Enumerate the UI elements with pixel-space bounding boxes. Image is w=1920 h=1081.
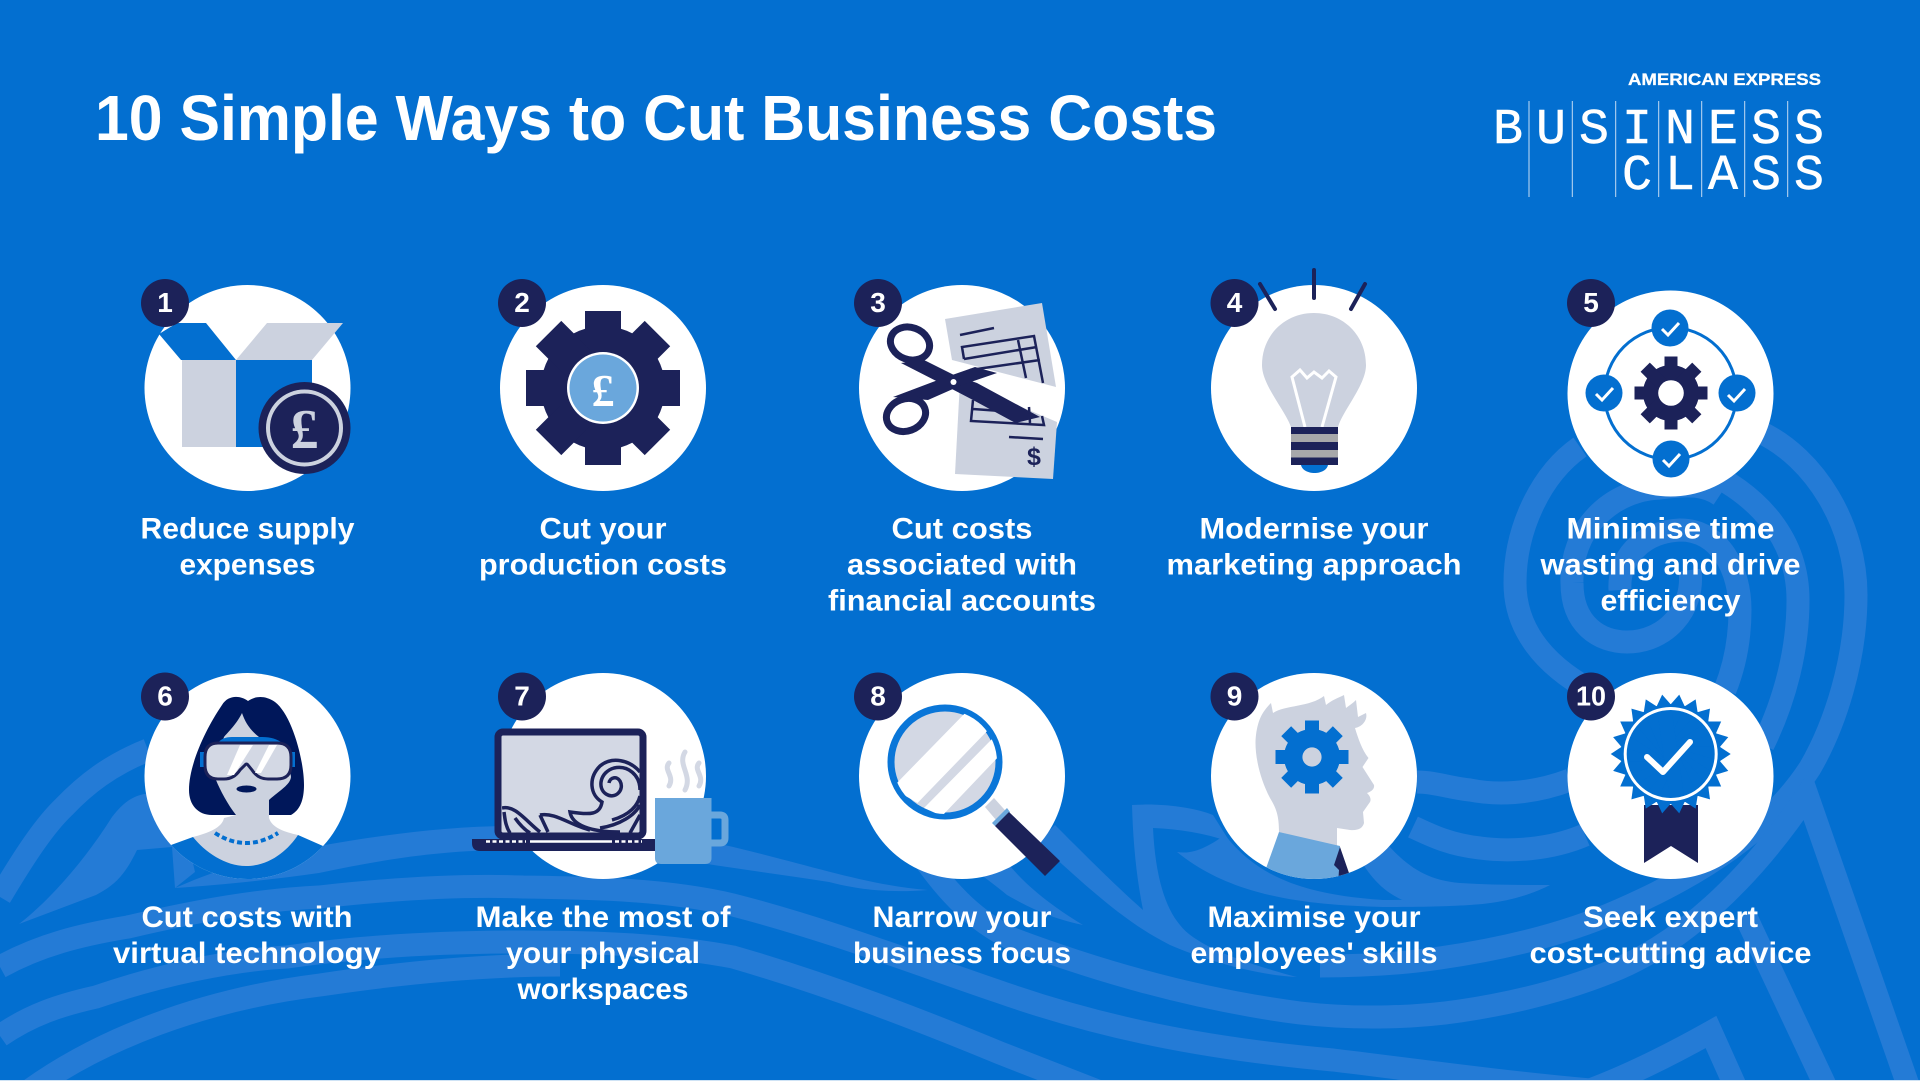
label 9: Maximise your [1208,901,1421,934]
logo: Class wordmark: C [1622,148,1652,205]
number badge 6: 6 [157,680,173,712]
item 4: marketing approach [1166,270,1462,582]
icon: scissors cutting an invoice: $ [1027,443,1041,471]
item 6: virtual technology [113,672,381,970]
logo: Business wordmark: I [1622,102,1652,159]
number badge 9: 9 [1227,680,1242,712]
item 9: employees' skills [1190,672,1438,970]
logo: Business wordmark: S [1751,102,1781,159]
mug [655,798,725,864]
icon: scissors cutting an invoice [859,285,1065,491]
label 2: Cut your [540,512,667,546]
logo: American Express Business Class [1493,70,1824,205]
number badge 9 [1210,672,1258,720]
logo: Class wordmark: S [1751,148,1781,205]
logo: Business wordmark: E [1708,102,1738,159]
icon: gear with pound: £ [592,365,614,416]
logo: Class wordmark: L [1665,148,1695,205]
item 7: physical workspaces [472,672,732,1006]
label 5: wasting and drive [1539,548,1800,582]
label 2: production costs [479,548,727,582]
label 5 [1539,512,1800,618]
number badge 5: 5 [1583,287,1599,318]
label 6 [113,901,381,970]
number badge 8: 8 [870,680,886,712]
logo: Business wordmark: U [1536,102,1566,159]
label 8: Narrow your [872,901,1052,934]
background wave pattern [0,432,1908,1081]
label 10: cost-cutting advice [1530,937,1812,970]
item 10: expert advice [1530,672,1812,970]
logo: Class wordmark: S [1794,148,1824,205]
label 1 [140,512,355,582]
label 3: Cut costs [892,512,1032,546]
label 7: Make the most of [476,901,732,934]
label 2 [479,512,727,582]
logo: Business wordmark: S [1794,102,1824,159]
number badge 3: 3 [870,287,886,318]
title: 10 Simple Ways to Cut Business Costs [95,82,1217,154]
label 4: Modernise your [1200,512,1429,546]
number badge 8 [854,672,902,720]
icon: box and pound coin: £ [290,399,318,461]
label 3 [828,512,1096,618]
number badge 2 [498,279,546,327]
number badge 7: 7 [514,680,530,712]
number badge 3 [854,279,902,327]
logo: Business wordmark: B [1493,102,1523,159]
item 3: financial accounts [828,279,1096,618]
label 4 [1166,512,1462,582]
logo: Class wordmark: A [1708,148,1738,205]
label 10 [1530,901,1812,970]
item 2: production costs [479,279,727,582]
number badge 5 [1567,279,1615,327]
icon: head profile with gear [1211,673,1417,890]
steam [667,752,701,790]
label 1: expenses [180,548,316,582]
icon: box and pound coin [144,285,350,491]
label 9 [1190,901,1438,970]
number badge 7 [498,672,546,720]
laptop [472,732,660,851]
item 8: narrow business focus [853,672,1071,970]
number badge 4: 4 [1227,287,1243,318]
logo: Business wordmark [1493,102,1824,159]
number badge 10: 10 [1576,680,1606,712]
number badge 1: 1 [157,287,173,318]
label 8: business focus [853,937,1071,970]
logo: brand name: AMERICAN EXPRESS [1628,70,1821,89]
label 1: Reduce supply [140,512,355,546]
item 1: reduce supply expenses [140,279,355,582]
label 3: financial accounts [828,584,1096,618]
item 5: minimise time wasting [1539,279,1800,618]
label 7 [476,901,732,1006]
label 7: your physical [506,937,700,970]
icon: award rosette [1568,673,1774,879]
number badge 10 [1567,672,1615,720]
icon: magnifying glass [859,673,1065,879]
label 7: workspaces [517,973,688,1006]
number badge 1 [141,279,189,327]
number badge 2: 2 [514,287,530,318]
logo: Business wordmark: N [1665,102,1695,159]
label 5: efficiency [1600,584,1741,618]
label 8 [853,901,1071,970]
logo: Class wordmark [1622,148,1824,205]
label 6: Cut costs with [142,901,352,934]
scissors [882,322,1040,437]
icon: woman with VR goggles [144,673,350,890]
label 3: associated with [847,548,1077,582]
number badge 4 [1210,279,1258,327]
number badge 6 [141,672,189,720]
label 6: virtual technology [113,937,381,970]
label 10: Seek expert [1583,901,1758,934]
label 4: marketing approach [1166,548,1462,582]
icon: gear with checkmark cycle [1568,290,1774,496]
icon: light bulb [1211,270,1417,491]
label 5: Minimise time [1566,512,1774,546]
label 9: employees' skills [1190,937,1438,970]
logo: Business wordmark: S [1579,102,1609,159]
icon: gear with pound [500,285,706,491]
icon: laptop and coffee mug [472,673,725,879]
